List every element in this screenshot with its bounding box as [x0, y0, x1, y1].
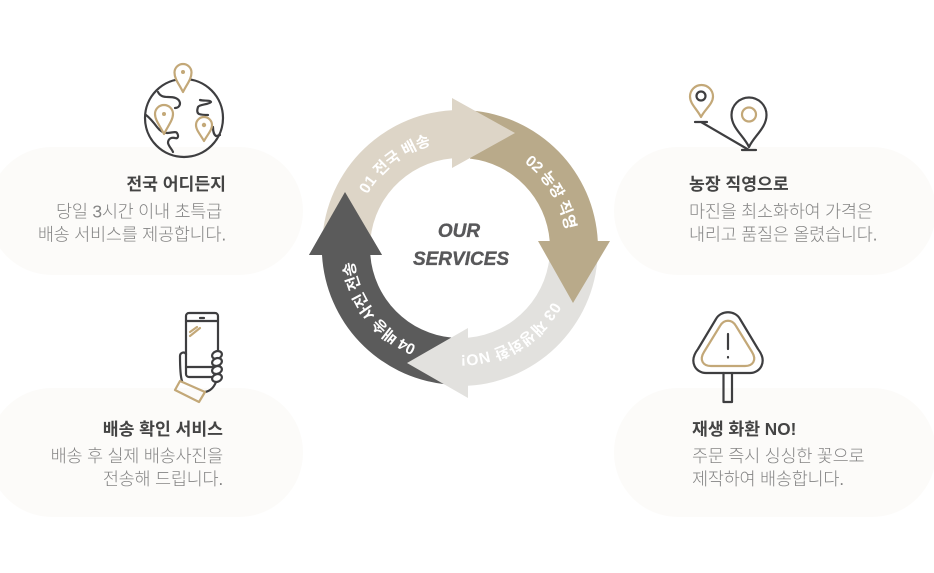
- center heading: OUR: [438, 221, 480, 242]
- text: farm direct: [689, 174, 877, 244]
- panel: farm direct background: [614, 147, 934, 275]
- panel: nationwide delivery background: [0, 147, 303, 275]
- label 01: 01 전국 배송: [360, 134, 429, 192]
- text: no recycled wreaths: 재생 화환 NO!: [692, 419, 796, 439]
- icon: hand holding phone: [175, 313, 223, 402]
- center heading: [413, 221, 509, 270]
- text: delivery confirmation: [51, 419, 223, 489]
- text: delivery confirmation: 배송 후 실제 배송사진을: [51, 446, 223, 466]
- arrow 02 tan: [470, 110, 610, 303]
- arrow 03 light gray: [407, 248, 598, 398]
- text: delivery confirmation: 배송 확인 서비스: [103, 419, 223, 439]
- text: nationwide delivery: 배송 서비스를 제공합니다.: [38, 224, 226, 244]
- text: no recycled wreaths: 주문 즉시 싱싱한 꽃으로: [692, 446, 864, 466]
- text: no recycled wreaths: 제작하여 배송합니다.: [692, 469, 844, 489]
- text: farm direct: 마진을 최소화하여 가격은: [689, 202, 873, 222]
- arrow 04 dark: [309, 192, 452, 384]
- icon: globe with pins: [145, 64, 223, 157]
- label 02: 02 농장 직영: [526, 156, 578, 228]
- center heading: SERVICES: [413, 249, 509, 270]
- text: nationwide delivery: 당일 3시간 이내 초특급: [56, 202, 222, 222]
- text: nationwide delivery: [38, 174, 226, 244]
- cycle diagram: [309, 98, 610, 398]
- text: nationwide delivery: 전국 어디든지: [126, 174, 226, 194]
- arrow 01 beige: [322, 98, 515, 248]
- text: farm direct: 농장 직영으로: [689, 174, 789, 194]
- panel: no recycled wreaths background: [614, 388, 934, 517]
- text: no recycled wreaths: [692, 419, 864, 489]
- label 04: 04 배송 사진 전송: [342, 262, 415, 354]
- icon: map pins route: [690, 85, 766, 150]
- arrow 04 head: [309, 192, 382, 255]
- text: farm direct: 내리고 품질은 올렸습니다.: [689, 224, 877, 244]
- text: delivery confirmation: 전송해 드립니다.: [103, 469, 223, 489]
- panel: delivery confirmation background: [0, 388, 303, 517]
- label 03: 03 재생화환 NO!: [462, 304, 560, 366]
- icon: warning sign: [693, 312, 763, 402]
